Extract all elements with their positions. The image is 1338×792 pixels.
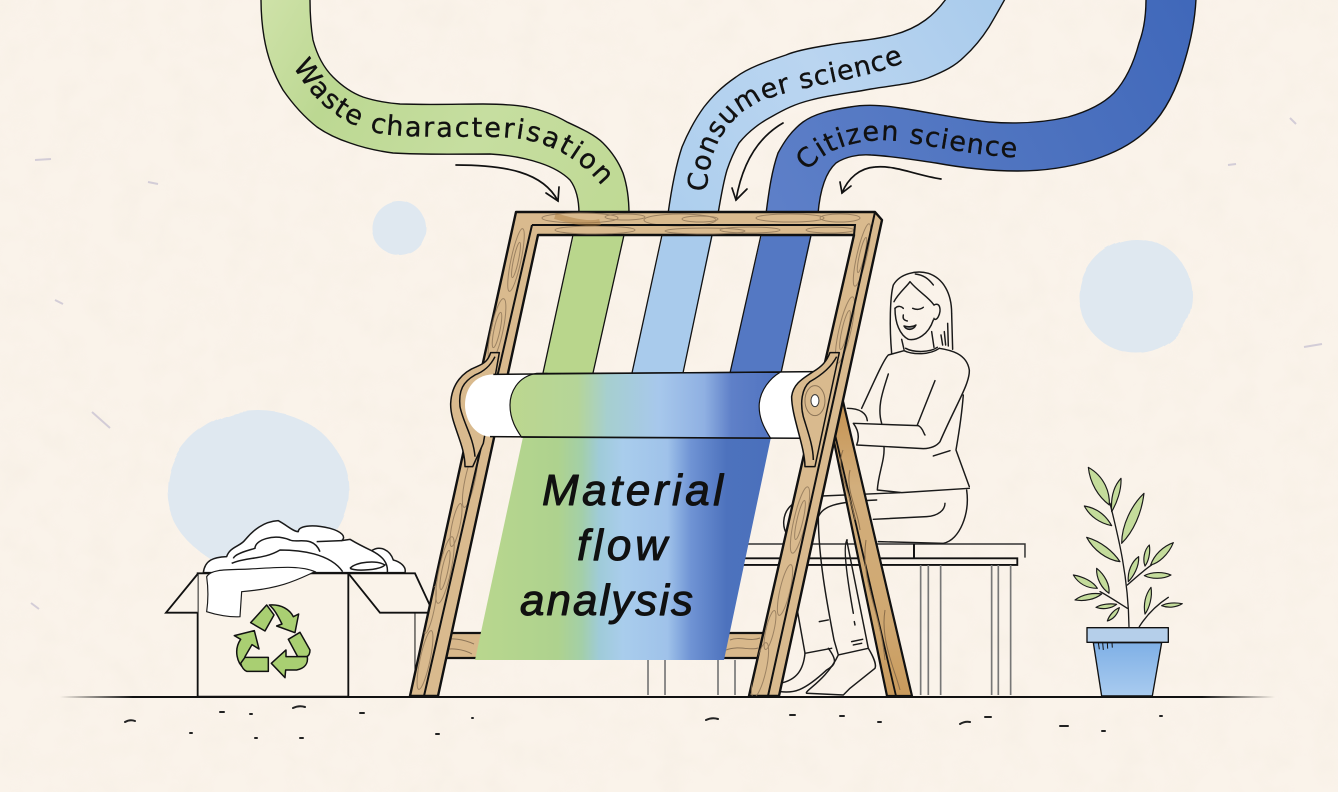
ground line bbox=[60, 696, 1275, 698]
title text bbox=[520, 466, 724, 625]
icon: recycling symbol bbox=[234, 605, 310, 678]
hair and face bbox=[890, 272, 953, 353]
torso and arms bbox=[847, 347, 969, 493]
loom cross bar bbox=[434, 633, 765, 658]
white roller bbox=[465, 372, 817, 438]
ribbon: waste characterisation bbox=[260, 0, 630, 211]
frame edge lines bbox=[424, 212, 875, 696]
ribbon: consumer science bbox=[668, 0, 1006, 211]
loom roller bbox=[465, 353, 839, 467]
ribbon label: Citizen science bbox=[797, 125, 1016, 167]
plant stems bbox=[1100, 503, 1168, 627]
box body bbox=[166, 573, 433, 697]
left roller bracket bbox=[451, 353, 499, 467]
woven cloth with title bbox=[475, 437, 771, 660]
loom frame bbox=[410, 212, 882, 699]
arrow: citizen to frame bbox=[840, 167, 941, 193]
arrow: waste to frame bbox=[456, 165, 559, 201]
warp stripes in the loom bbox=[543, 212, 817, 373]
legs and shoes bbox=[780, 490, 967, 695]
hanging shirt bbox=[207, 567, 315, 617]
potted plant bbox=[1073, 467, 1182, 696]
right bracket bbox=[792, 353, 839, 467]
title text: analysis bbox=[520, 576, 693, 625]
leaves bbox=[1073, 467, 1182, 621]
ribbon: citizen science bbox=[766, 0, 1197, 211]
ribbon label: Waste characterisation bbox=[296, 56, 610, 184]
coloured cloth on roller bbox=[510, 372, 780, 438]
person seated at the loom bbox=[780, 272, 969, 695]
watercolour blots bbox=[167, 201, 1193, 570]
clothes box bbox=[166, 521, 433, 697]
back leg of loom bbox=[832, 397, 912, 696]
title text: flow bbox=[577, 521, 670, 570]
ribbon label: Consumer science bbox=[687, 50, 902, 190]
ground marks bbox=[125, 706, 1162, 738]
arrow: consumer to frame bbox=[732, 123, 783, 200]
clothes pile bbox=[203, 521, 405, 573]
bench bbox=[648, 544, 1025, 695]
paper flecks bbox=[31, 118, 1322, 609]
pot bbox=[1087, 628, 1168, 696]
wood grain bbox=[414, 213, 874, 699]
title text: Material bbox=[542, 466, 724, 515]
